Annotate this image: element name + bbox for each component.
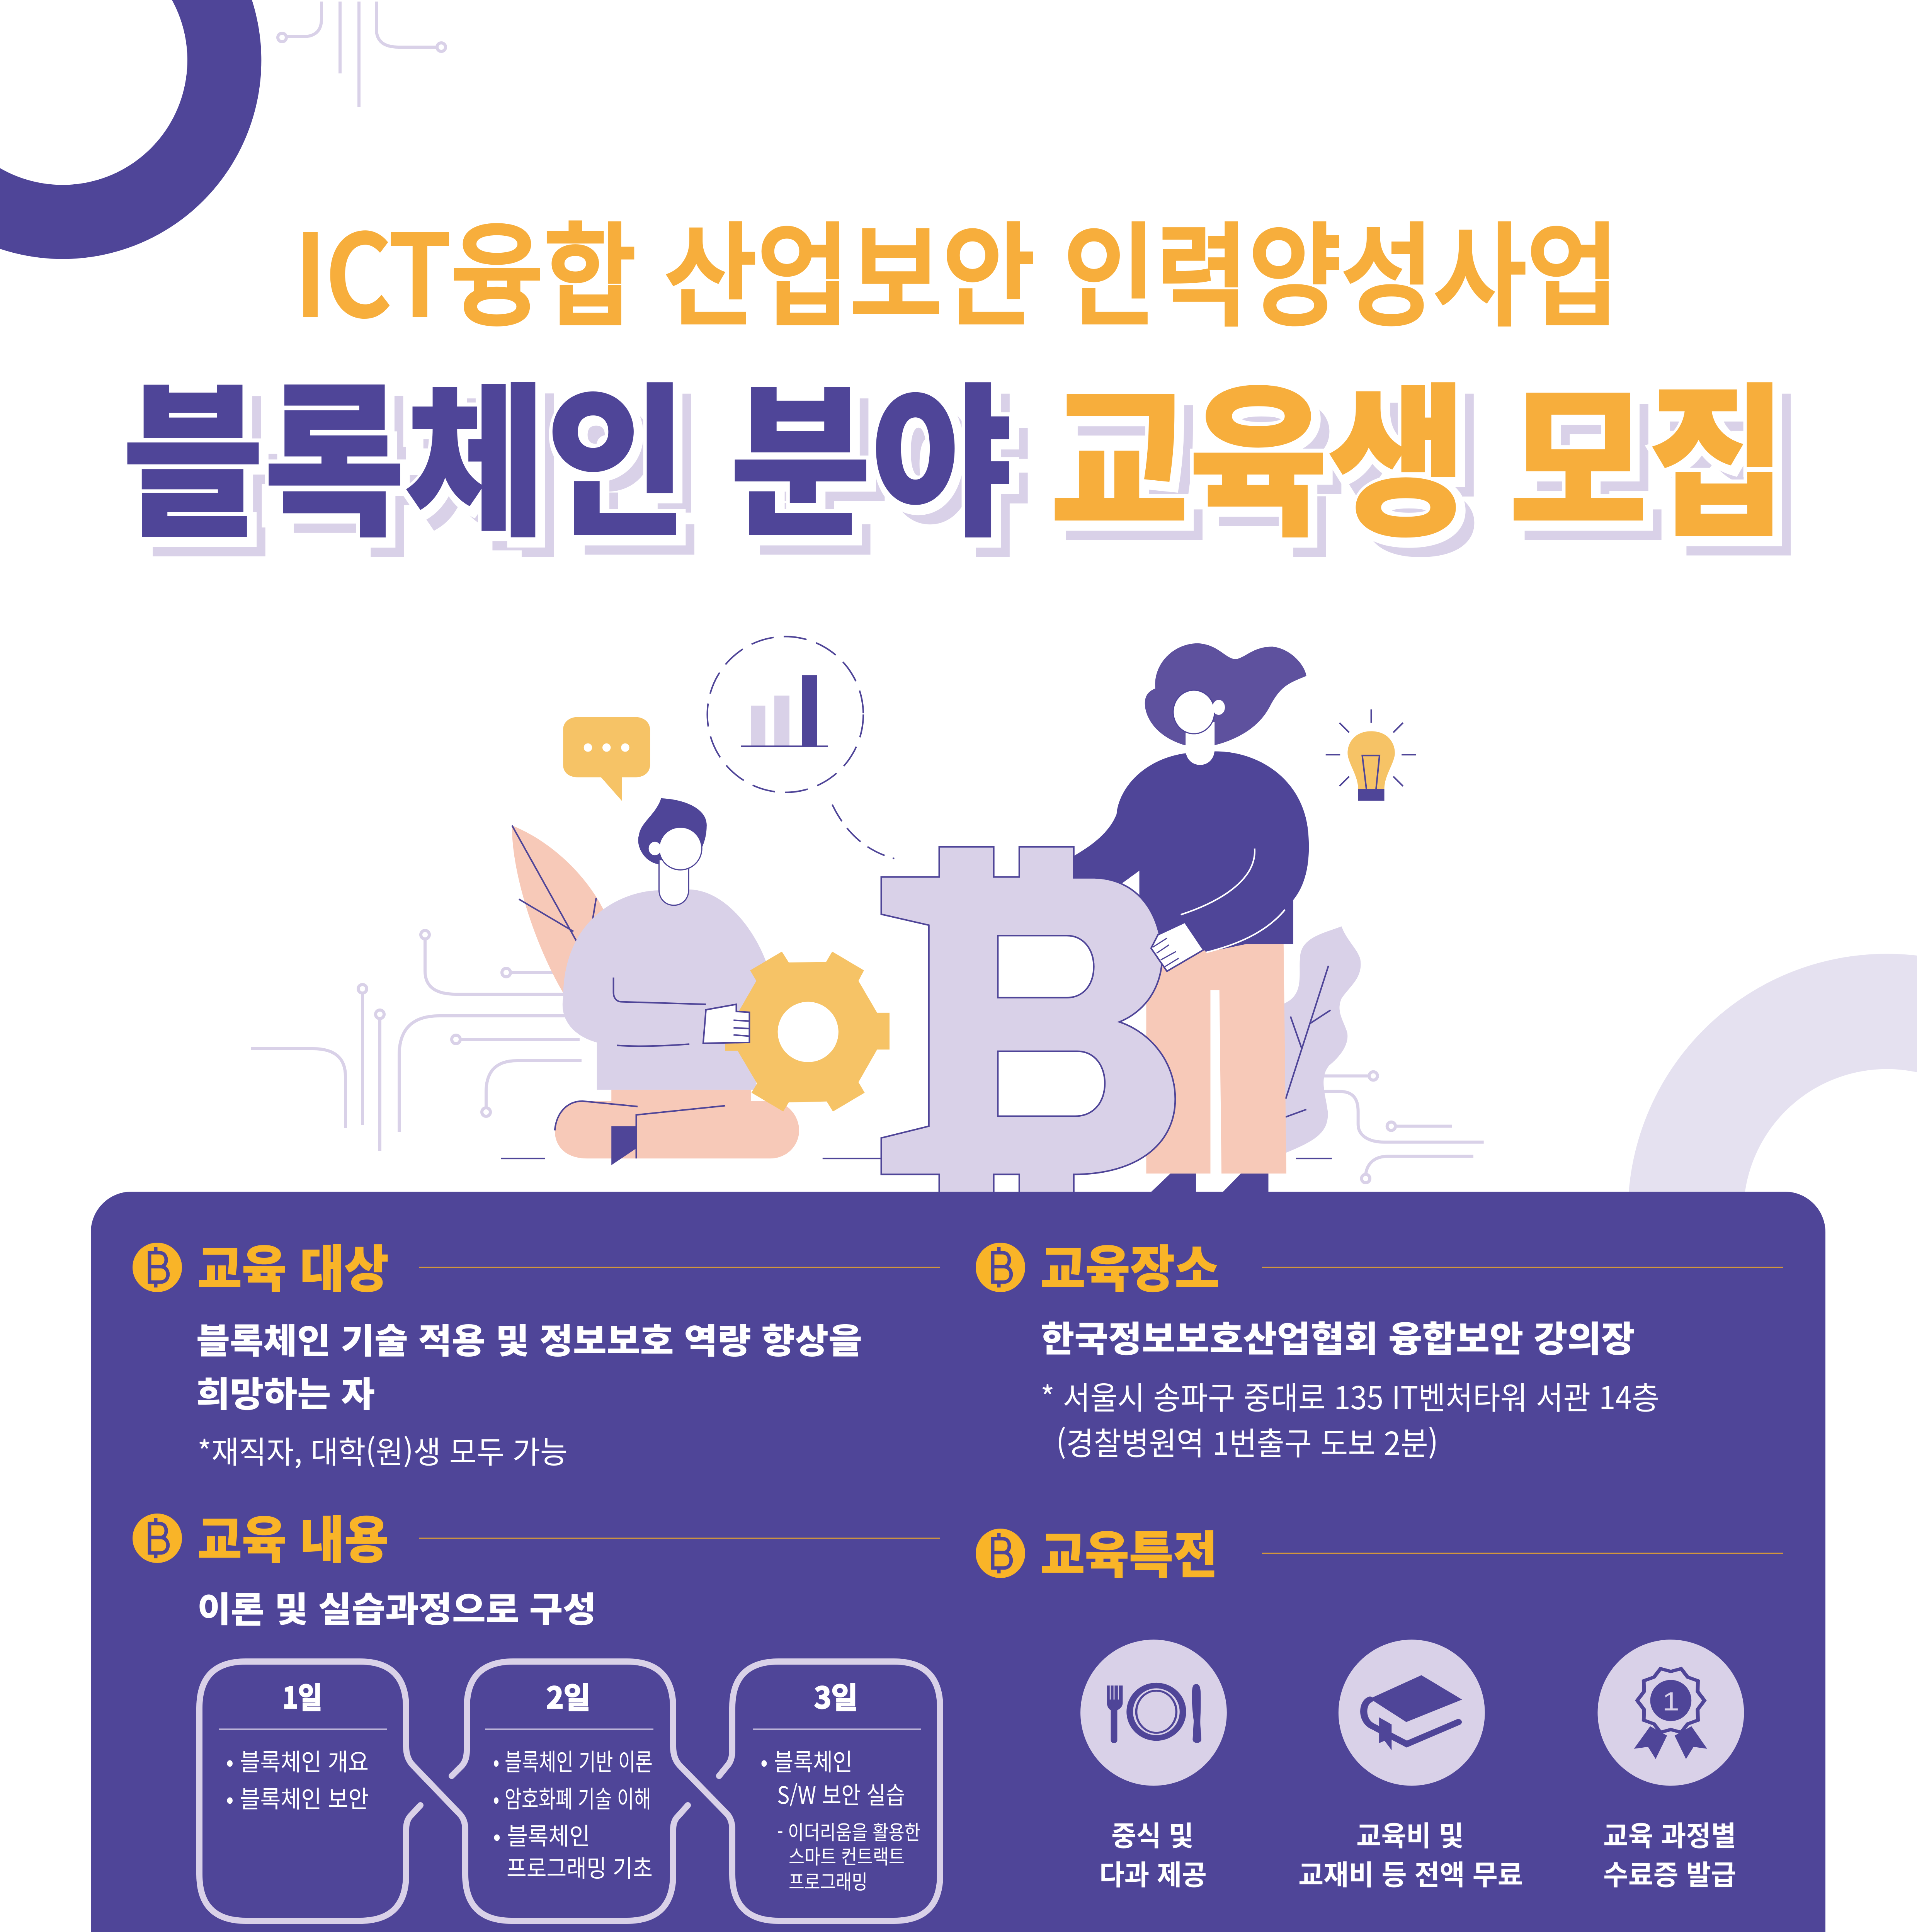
benefit label: certificate: 교육 과정별: [1603, 1813, 1736, 1854]
coin icon: [976, 1243, 1025, 1292]
speech bubble: [563, 717, 650, 801]
left leaf: [512, 825, 618, 998]
day 2: • 블록체인: [493, 1817, 590, 1852]
day 2: 2일: [546, 1674, 590, 1717]
coin icon: [133, 1243, 182, 1292]
benefit label: meals: 중식 및: [1111, 1813, 1194, 1854]
icon: book: [1339, 1639, 1485, 1786]
address: * 서울시 송파구 중대로 135 IT벤처타워 서관 14층: [1041, 1372, 1659, 1418]
day 2: 프로그래밍 기초: [507, 1849, 653, 1884]
day 1: [219, 1674, 387, 1815]
right leaf: [1284, 927, 1361, 1153]
decoration: top-left ring: [0, 0, 261, 259]
day 3: 3일: [814, 1674, 858, 1717]
day 3: 프로그래밍: [789, 1866, 867, 1895]
day 2: • 블록체인 기반 이론: [493, 1743, 653, 1777]
day 2: • 암호화폐 기술 이해: [493, 1780, 651, 1815]
man: [555, 798, 799, 1165]
title: main heading: 교육생 모집: [1053, 376, 1790, 560]
heading: 교육특전: [1041, 1514, 1218, 1588]
dashed circle bar chart: [707, 636, 863, 793]
right circuit lines: [1321, 1072, 1484, 1183]
decoration: right ring: [1628, 954, 1917, 1198]
day 1: • 블록체인 보안: [226, 1780, 369, 1815]
title: main heading: 블록체인 분야: [126, 376, 1015, 560]
illustration: left circuit lines: [251, 930, 582, 1151]
icon: meal: [1080, 1639, 1227, 1786]
section: course content: [133, 1499, 940, 1921]
day 3: • 블록체인: [760, 1743, 852, 1777]
section: target audience: [133, 1228, 940, 1473]
day 1: • 블록체인 개요: [226, 1743, 369, 1777]
ground lines: [501, 1158, 1332, 1159]
day 3: 스마트 컨트랙트: [789, 1841, 905, 1870]
woman's hand: [1151, 922, 1204, 971]
benefit label: certificate: [1603, 1813, 1736, 1893]
gear: [725, 952, 890, 1112]
benefit label: certificate: 수료증 발급: [1603, 1852, 1736, 1893]
illustration: blockchain people: [501, 636, 1484, 1195]
day boxes outline: [199, 1662, 940, 1921]
light bulb: [1326, 709, 1416, 801]
benefit label: tuition: 교재비 등 전액 무료: [1298, 1852, 1523, 1893]
icon: certificate medal: [1597, 1639, 1744, 1786]
bitcoin symbol: [881, 847, 1175, 1195]
heading: 교육 대상: [197, 1228, 389, 1302]
coin icon: [976, 1529, 1025, 1578]
decoration: top circuit lines: [278, 2, 446, 107]
title: programme name: ICT융합 산업보안 인력양성사업: [295, 187, 1619, 348]
venue name: 한국정보보호산업협회 융합보안 강의장: [1041, 1311, 1635, 1362]
title: main heading: 블록체인 분야: [122, 373, 1012, 556]
title: main heading: 블록체인 분야: [137, 388, 1027, 572]
note: *재직자, 대학(원)생 모두 가능: [197, 1428, 568, 1473]
panel: information background: [91, 1192, 1825, 1932]
day 1: 1일: [282, 1674, 322, 1717]
body text second line: 희망하는 자: [196, 1366, 375, 1417]
day 3: S/W 보안 실습: [777, 1776, 905, 1811]
day 2: [485, 1674, 653, 1884]
benefit label: meals: [1099, 1813, 1207, 1893]
title: main heading: 교육생 모집: [1050, 373, 1787, 556]
section: venue: [976, 1228, 1783, 1464]
benefit label: tuition: 교육비 및: [1356, 1813, 1464, 1854]
dashed connector: [832, 804, 894, 859]
man's hand: [703, 1004, 749, 1043]
benefit label: meals: 다과 제공: [1099, 1852, 1207, 1893]
directions: (경찰병원역 1번출구 도보 2분): [1056, 1418, 1438, 1464]
section: benefits: [976, 1514, 1783, 1893]
benefit label: tuition: [1298, 1813, 1523, 1893]
icon: certificate medal: 1: [1662, 1687, 1679, 1716]
day 3: - 이더리움을 활용한: [777, 1816, 920, 1845]
woman: [1074, 643, 1309, 1192]
day 3: [753, 1674, 921, 1895]
title: main heading: 교육생 모집: [1065, 388, 1801, 572]
title: main heading: [122, 373, 1801, 572]
coin icon: [133, 1514, 182, 1563]
heading: 교육장소: [1041, 1228, 1220, 1302]
heading: 교육 내용: [197, 1499, 389, 1573]
subheading: 이론 및 실습과정으로 구성: [197, 1582, 596, 1632]
body text: 블록체인 기술 적용 및 정보보호 역량 향상을: [196, 1313, 862, 1363]
